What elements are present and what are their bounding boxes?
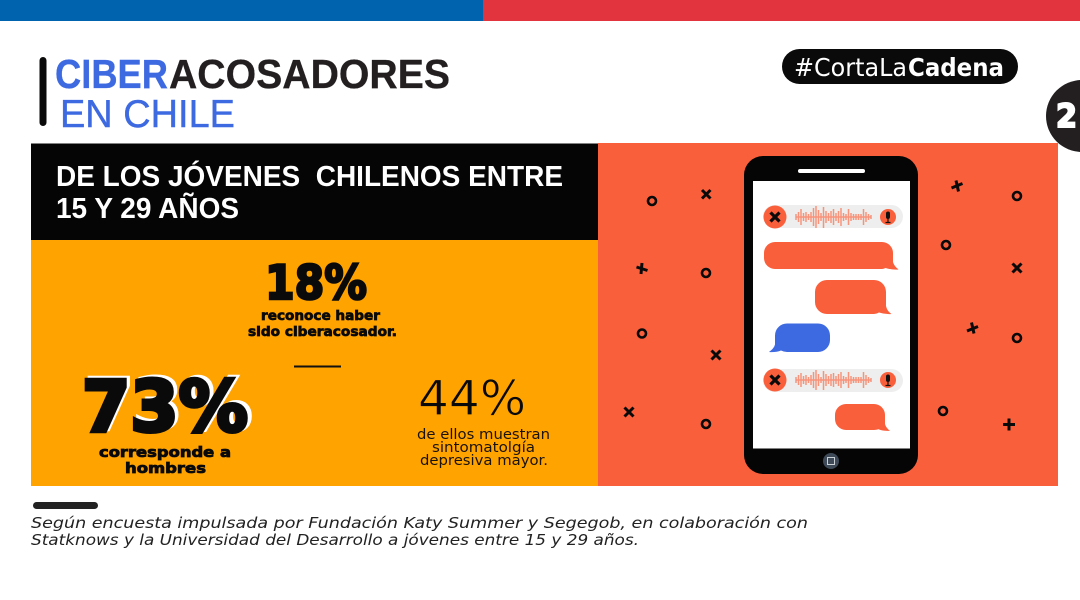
title: EN CHILE [60, 93, 235, 136]
hashtag pill [782, 49, 1018, 84]
title: ACOSADORES [169, 51, 450, 97]
page number badge [1046, 80, 1080, 152]
footer source note [31, 502, 808, 549]
page number badge: 2 [1056, 97, 1077, 135]
title [40, 51, 450, 136]
stat: 18% [248, 256, 397, 340]
stat: 73%: hombres [125, 461, 206, 477]
stat: 44%: sintomatolgía [432, 440, 535, 456]
stat: 18%: reconoce haber [261, 309, 381, 324]
stat: 73%: 73% [82, 366, 248, 448]
message bubble 2 [815, 280, 892, 314]
stat: 73%: 73% [85, 364, 252, 446]
footer source note: Statknows y la Universidad del Desarrollo a jóvenes entre 15 y 29 años. [31, 531, 639, 549]
panel: statistics [31, 240, 598, 486]
stat: 18%: sido ciberacosador. [248, 325, 397, 340]
footer source note: Según encuesta impulsada por Fundación Katy Summer y Segegob, en colaboración con [31, 514, 808, 532]
stat: 44%: 44% [418, 371, 526, 427]
stat: 18%: 18% [265, 256, 367, 311]
hashtag pill: Cadena [908, 53, 1004, 82]
home button [823, 453, 839, 469]
panel: header [31, 144, 598, 240]
message bubble blue [769, 324, 830, 352]
voice message 1 [763, 205, 903, 228]
top colour band [0, 0, 1080, 21]
panel: illustration background [598, 143, 1058, 486]
stat: 73%: corresponde a [99, 445, 231, 461]
message bubble 3 [835, 404, 890, 431]
icon: smartphone [744, 156, 918, 474]
stat: 44% [417, 371, 550, 469]
voice message 2 [763, 368, 903, 392]
message bubble 1 [764, 242, 898, 270]
stat: 44%: depresiva mayor. [420, 453, 548, 469]
panel: header: DE LOS JÓVENES CHILENOS ENTRE [56, 159, 563, 193]
title: CIBER [55, 51, 168, 97]
stat: 44%: de ellos muestran [417, 427, 550, 443]
decorative circles and crosses [624, 180, 1022, 430]
panel: header: 15 Y 29 AÑOS [56, 191, 239, 225]
hashtag pill: #CortaLa [794, 53, 907, 82]
